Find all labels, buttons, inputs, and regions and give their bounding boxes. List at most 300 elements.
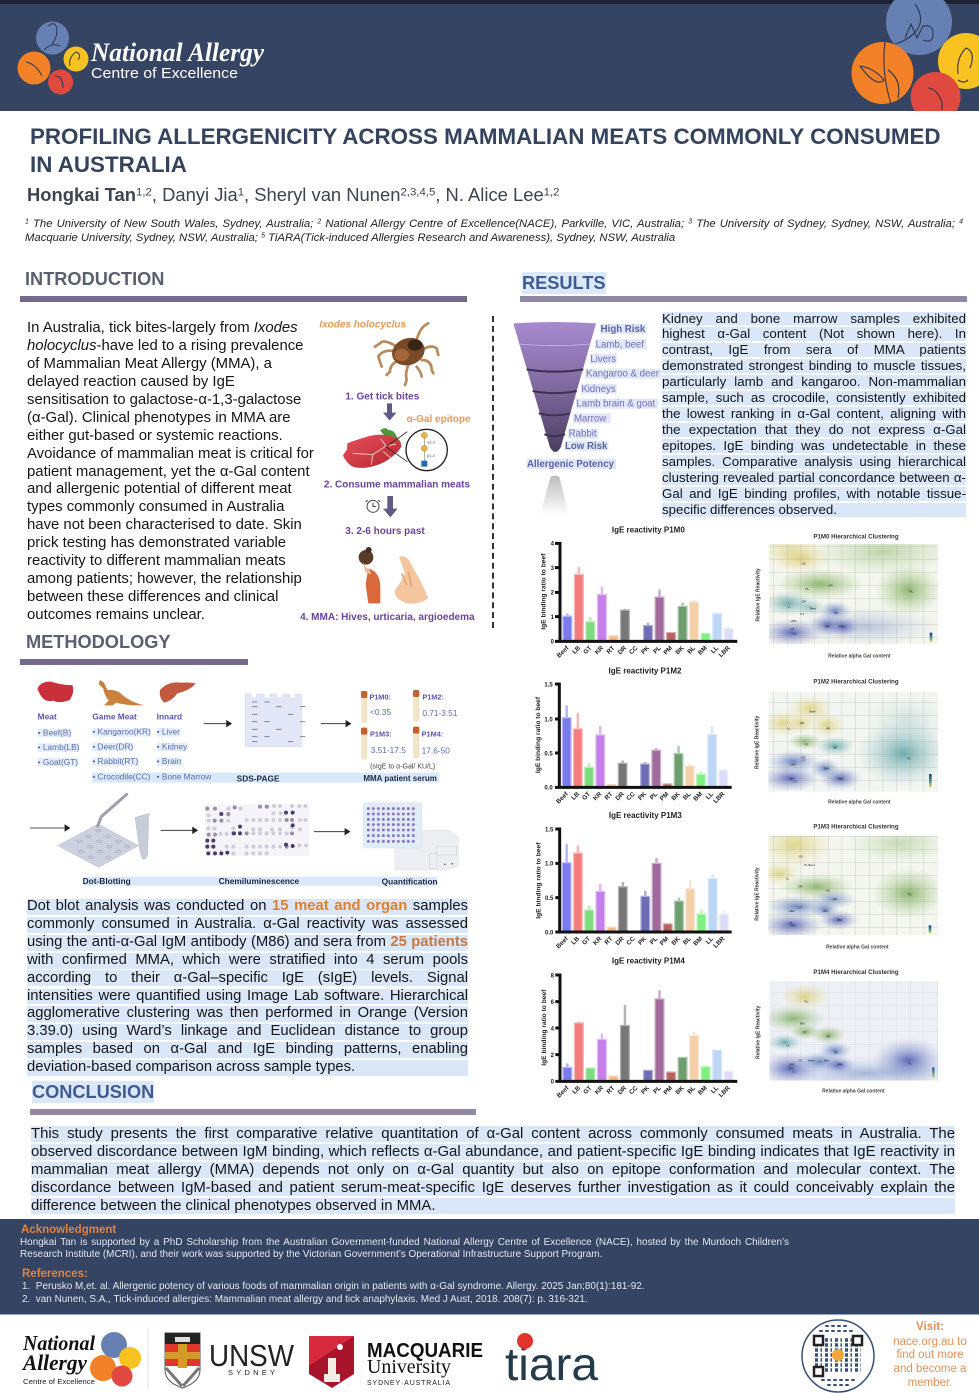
clustering map: P1M3: Relative IgE Reactivity <box>754 867 760 921</box>
allergenic potency funnel: High Risk <box>601 324 646 335</box>
clustering map: P1M0: GT <box>800 612 804 616</box>
bar chart: P1M0: RT <box>605 645 617 656</box>
QR code <box>802 1320 874 1392</box>
clustering map: P1M4: P1M4 Hierarchical Clustering <box>813 969 899 976</box>
conclusion text: difference between the clinical phenotypes observed in MMA. <box>31 1198 436 1214</box>
visit call to action: nace.org.au to <box>893 1336 967 1348</box>
icon: tick <box>375 323 438 385</box>
tick to allergy pathway figure: 2. Consume mammalian meats <box>324 479 471 490</box>
visit call to action: Visit: <box>916 1321 944 1333</box>
bar chart: P1M2: BL <box>682 791 693 802</box>
conclusion text: discordance between IgM-based and patient serum-meat-specific IgE deserves further investigation as it could conceivably explain the <box>31 1180 955 1196</box>
clustering map: P1M2: PM <box>839 777 844 781</box>
methodology workflow figure: Game Meat <box>92 712 137 722</box>
methodology workflow figure: • Deer(DR) <box>92 741 133 751</box>
results text: the expectation that they do not express α-Gal <box>662 422 966 437</box>
methodology workflow figure: SDS-PAGE <box>237 773 280 783</box>
clustering map: P1M2: Beef <box>809 710 816 714</box>
logo: Macquarie University: University <box>367 1356 451 1378</box>
clustering map: P1M4: BM <box>824 1058 829 1062</box>
bar chart: P1M3: GT <box>581 935 592 947</box>
charts panel <box>535 526 938 1099</box>
allergenic potency funnel <box>513 322 662 510</box>
bar chart: P1M0: BL <box>686 645 697 656</box>
bar chart: P1M0: BM <box>697 645 709 657</box>
methodology workflow figure: (sIgE to α-Gal/ KU/L) <box>370 764 435 771</box>
bar chart: P1M2: PM <box>659 791 670 802</box>
bar chart: P1M0: Beef <box>556 644 571 659</box>
results text: epitopes. IgE binding was undetectable in these <box>662 438 966 453</box>
clustering map: P1M2: LB <box>800 721 804 725</box>
clustering map: P1M4: LL <box>787 1044 790 1048</box>
logo: National Allergy: National <box>22 1331 95 1355</box>
clustering map: P1M3: GT <box>798 905 803 909</box>
results text: demonstrated strongest binding to muscle tissues, <box>662 358 966 373</box>
results text: contrast, IgE from sera of MMA patients <box>662 342 966 357</box>
bar chart: P1M4: GT <box>582 1085 594 1096</box>
bar chart: P1M2: PK <box>637 790 648 802</box>
acknowledgment text <box>20 1237 789 1260</box>
tick to allergy pathway figure: α-Gal epitope <box>407 414 471 425</box>
clustering map: P1M0: LL <box>787 604 791 608</box>
tick to allergy pathway figure: 3. 2-6 hours past <box>345 526 425 537</box>
bar chart: P1M3: IgE binding ratio to beef <box>536 842 543 919</box>
bar chart: P1M0: 1 <box>551 615 555 621</box>
clustering map: P1M2: Relative IgE Reactivity <box>754 715 760 769</box>
serum tubes: P1M0: <box>369 692 391 701</box>
header logo: Centre of Excellence <box>91 66 238 82</box>
clustering map: P1M0: KR <box>828 584 833 588</box>
clustering map: P1M4: PM <box>838 1062 843 1066</box>
affiliations: 1 The University of New South Wales, Sydney, Australia; 2 National Allergy Centre of Excellence(NACE), Parkville, VIC, Australia; 3 The University of Sydney, Sydney, NSW, Australia; 4 <box>25 218 963 230</box>
results text: clustering revealed partial concordance between α- <box>662 470 966 485</box>
arrow <box>30 825 70 831</box>
icon: kangaroo <box>99 680 144 705</box>
clustering map: P1M3: Relative alpha Gal content <box>826 944 889 950</box>
clustering map: P1M2: PL <box>805 742 809 746</box>
title: PROFILING ALLERGENICITY ACROSS MAMMALIAN MEATS COMMONLY CONSUMED <box>30 124 941 149</box>
bar chart: P1M3: 0.5 <box>545 896 554 902</box>
clustering map: P1M3: RT <box>789 921 793 925</box>
logo: National Allergy: Allergy <box>21 1350 87 1375</box>
affiliations: Macquarie University, Sydney, NSW, Australia; 5 TiARA(Tick-induced Allergies Research and Awareness), Sydney, NSW, Australia <box>25 232 675 244</box>
references heading: References: <box>22 1268 88 1280</box>
results text: samples. Comparative analysis using hierarchical <box>662 454 966 469</box>
bar chart: P1M4 <box>541 956 737 1099</box>
conclusion text <box>31 1126 955 1214</box>
bar chart: P1M2: Beef <box>555 790 570 805</box>
bar chart: P1M3: RT <box>603 935 615 946</box>
clustering map: P1M4: Beef <box>808 1059 815 1063</box>
bar chart: P1M3: PK <box>637 935 648 947</box>
results text: the lowest ranking in α-Gal content, aligning with <box>662 406 966 421</box>
conclusion text: mammalian meat allergy (MMA) depends not only on α-Gal quantity but also on epitope conformation and molecular context. The <box>31 1162 955 1178</box>
clustering map: P1M2: GT <box>802 759 806 763</box>
arrow <box>204 721 231 727</box>
serum tubes <box>361 690 458 759</box>
dot blot methods text <box>27 898 468 1076</box>
icon: plate reader <box>363 803 458 870</box>
title: IN AUSTRALIA <box>30 152 187 176</box>
bar chart: P1M4: LB <box>571 1084 582 1096</box>
methodology workflow figure: • Liver <box>157 726 180 736</box>
bar chart: P1M3: DR <box>614 935 626 947</box>
clustering map: P1M4: Relative IgE Reactivity <box>755 1005 761 1059</box>
dot blot methods text: intensities were quantified using Image Lab software. Hierarchical <box>27 988 468 1004</box>
clustering map: P1M0: Beef <box>810 606 816 610</box>
visit call to action: find out more <box>896 1349 964 1361</box>
heading: methodology: METHODOLOGY <box>26 632 170 652</box>
clustering map: P1M3: BM <box>823 909 828 913</box>
clustering map: P1M3: P1M3 Hierarchical Clustering <box>813 824 899 831</box>
serum tubes: P1M3: <box>370 730 392 739</box>
dot blot methods text: commonly consumed in Australia. α-Gal reactivity was assessed <box>27 916 468 932</box>
arrow <box>161 827 197 833</box>
allergenic potency funnel: Rabbit <box>569 429 597 440</box>
methodology workflow figure: • Kangaroo(KR) <box>92 726 151 736</box>
introduction text: reactivity to different mammalian meats <box>27 553 286 569</box>
logo: UNSW Sydney: UNSW <box>209 1338 295 1373</box>
introduction text: among patients; however, the relationship <box>27 571 302 587</box>
bar chart: P1M4: BK <box>674 1084 686 1096</box>
clustering map: P1M2: LL <box>787 726 791 730</box>
icon: epitope lens: α1.3 <box>427 440 436 445</box>
clustering map: P1M2: P1M2 Hierarchical Clustering <box>813 679 899 686</box>
icon: chemiluminescence membrane <box>205 804 309 856</box>
bar chart: P1M4: LBR <box>718 1085 732 1099</box>
bar chart: P1M2: 0.0 <box>544 786 553 792</box>
bar chart: P1M0 <box>540 526 737 659</box>
results text: sample, such as crocodile, consistently exhibited <box>662 390 966 405</box>
serum tubes: 3.51-17.5 <box>371 745 406 755</box>
clustering map: P1M0: DR <box>802 600 807 604</box>
bar chart: P1M4: 2 <box>551 1053 555 1059</box>
bar chart: P1M2: 1.5 <box>544 683 553 689</box>
methodology workflow figure: Quantification <box>382 876 438 886</box>
bar chart: P1M3: CC <box>625 935 637 947</box>
clustering map: P1M2 <box>754 679 950 805</box>
arrow <box>314 829 350 835</box>
introduction text: holocyclus-have led to a rising prevalence <box>27 338 303 354</box>
clustering map: P1M4: GT <box>798 1059 803 1063</box>
icon: epitope lens: β1.4 <box>427 453 436 458</box>
serum tubes: <0.35 <box>370 707 391 717</box>
methodology workflow figure: • Brain <box>157 756 182 766</box>
bar chart: P1M0: 3 <box>551 566 555 572</box>
bar chart: P1M4: KR <box>594 1084 605 1096</box>
logo: National Allergy: Centre of Excellence <box>23 1377 95 1386</box>
dot blot methods text: samples based on α-Gal and IgE binding patterns, enabling <box>27 1041 468 1057</box>
clustering map: P1M3: LL <box>786 877 790 881</box>
visit call to action: and become a <box>894 1363 967 1375</box>
bar chart: P1M0: PK <box>640 644 651 656</box>
allergenic potency funnel: Lamb brain & goat <box>576 399 656 410</box>
bar chart: P1M0: GT <box>582 645 594 656</box>
bar chart: P1M4: DR <box>617 1084 628 1096</box>
methodology workflow figure: MMA patient serum <box>363 774 437 783</box>
bar chart: P1M4: Beef <box>556 1084 571 1099</box>
arrow <box>383 403 396 421</box>
dot blot methods text: Dot blot analysis was conducted on 15 meat and organ samples <box>27 898 468 914</box>
methodology workflow figure: • Bone Marrow <box>157 771 212 781</box>
methodology workflow figure: • Rabbit(RT) <box>92 756 138 766</box>
bar chart: P1M3: 1.0 <box>545 862 554 868</box>
bar chart: P1M3 <box>536 811 732 950</box>
references list: 1. Perusko M,et. al. Allergenic potency of various foods of mammalian origin in patients with α-Gal syndrome. Allergy. 2025 Jan;80(1):181-92. <box>22 1281 645 1292</box>
clustering map: P1M4: CC <box>792 1070 797 1074</box>
bar chart: P1M0: BK <box>674 644 686 656</box>
bar chart: P1M0: LBR <box>718 645 732 659</box>
clustering map: P1M0: RT <box>791 627 795 631</box>
introduction text: types commonly consumed in Australia <box>27 499 284 515</box>
bar chart: P1M3: 0.0 <box>545 930 554 936</box>
funnel reflection <box>540 476 569 515</box>
bar chart: P1M2: PL <box>649 791 660 801</box>
bar chart: P1M3: 1.5 <box>545 827 554 833</box>
clustering map: P1M0: PM <box>839 624 844 628</box>
bar chart: P1M4: CC <box>628 1084 640 1096</box>
bar chart: P1M2: IgE reactivity P1M2 <box>609 666 682 675</box>
bar chart: P1M3: PM <box>659 935 670 947</box>
bar chart: P1M3: BK <box>670 935 682 947</box>
allergenic potency funnel: Livers <box>590 354 616 365</box>
allergenic potency funnel: Marrow <box>574 413 606 424</box>
visit call to action: member. <box>908 1377 952 1389</box>
bar chart: P1M0: LL <box>710 645 720 655</box>
heading: conclusion: CONCLUSION <box>32 1082 154 1102</box>
authors: Hongkai Tan1,2, Danyi Jia1, Sheryl van Nunen2,3,4,5, N. Alice Lee1,2 <box>27 184 560 205</box>
bar chart: P1M3: KR <box>592 935 604 947</box>
clustering map: P1M0: LBR <box>791 619 797 623</box>
logo: tiara: tiara <box>505 1338 598 1390</box>
acknowledgment heading: Acknowledgment <box>21 1224 116 1236</box>
serum tubes: P1M4: <box>422 730 443 739</box>
icon: patient with hives <box>359 547 428 604</box>
results text: specific differences observed. <box>662 502 837 517</box>
clustering map: P1M4: PL <box>805 1000 809 1004</box>
methodology workflow figure: Chemiluminescence <box>219 876 300 886</box>
clustering map: P1M3: LB <box>799 855 803 859</box>
methodology workflow figure: Innard <box>157 712 182 722</box>
allergenic potency funnel: Lamb, beef <box>596 339 644 350</box>
icon: SDS-PAGE gel <box>245 694 305 747</box>
bar chart: P1M3: BM <box>692 935 704 947</box>
clustering map: P1M0: PL <box>909 590 913 594</box>
funnel shape <box>513 322 596 452</box>
bar chart: P1M4: IgE binding ratio to beef <box>541 989 548 1066</box>
clustering map: P1M3: CC <box>791 924 796 928</box>
clustering map: P1M2: CC <box>793 779 798 783</box>
clustering map: P1M2: RT <box>790 777 794 781</box>
icon: dot-blotting membrane <box>58 794 149 867</box>
bar chart: P1M3: LBR <box>712 935 727 950</box>
bar chart: P1M0: IgE reactivity P1M0 <box>612 526 685 535</box>
introduction text: sensitisation to galactose-α-1,3-galactose <box>27 392 301 408</box>
header band <box>0 0 979 111</box>
bar chart: P1M4: 6 <box>551 1000 555 1006</box>
introduction text: and allergenic potential of different meat <box>27 481 292 497</box>
bar chart: P1M4: RT <box>605 1085 617 1096</box>
logo: Macquarie University <box>309 1336 483 1388</box>
logo: Macquarie University: SYDNEY·AUSTRALIA <box>367 1380 450 1387</box>
bar chart: P1M2: GT <box>581 791 592 802</box>
introduction text: Avoidance of mammalian meat is critical for <box>27 446 314 462</box>
bar chart: P1M2: DR <box>614 790 626 802</box>
clustering map: P1M2: BK <box>833 746 837 750</box>
clustering map: P1M0: LB <box>802 562 805 566</box>
references list <box>22 1281 645 1304</box>
allergenic potency funnel: Allergenic Potency <box>527 459 615 470</box>
icon: meat steak <box>37 682 73 702</box>
bar chart: P1M4: BM <box>697 1085 709 1097</box>
bar chart: P1M4: 0 <box>551 1080 555 1086</box>
bar chart: P1M3: BL <box>682 935 693 946</box>
title <box>30 124 941 176</box>
results text <box>662 310 966 517</box>
clustering map: P1M4: RT <box>789 1066 793 1070</box>
results text: Kidney and bone marrow samples exhibited <box>662 310 966 326</box>
references list: 2. van Nunen, S.A., Tick-induced allergies: Mammalian meat allergy and tick anaphylaxis. Med J Aust, 2018. 208(7): p. 316-321. <box>22 1294 588 1304</box>
introduction text: prick testing has demonstrated variable <box>27 535 286 551</box>
bar chart: P1M4: 8 <box>551 973 555 979</box>
clustering map: P1M3: LBR <box>789 909 795 913</box>
bar chart: P1M3: IgE reactivity P1M3 <box>609 811 682 820</box>
header logo: National Allergy <box>90 38 264 67</box>
header logo <box>18 22 264 94</box>
clustering map: P1M3: PL Beef <box>804 863 815 867</box>
bar chart: P1M3: Beef <box>555 935 570 950</box>
clustering map: P1M2: BM <box>824 766 829 770</box>
allergenic potency funnel: Low Risk <box>565 441 608 452</box>
clustering map: P1M3 <box>754 822 953 950</box>
bar chart: P1M2: KR <box>592 790 604 802</box>
clustering map: P1M2: LBR <box>790 763 797 767</box>
clustering map: P1M4: BK <box>834 1050 838 1054</box>
clustering map: P1M0: CC <box>793 631 798 635</box>
bar chart: P1M4: PL <box>652 1085 663 1095</box>
tick to allergy pathway figure <box>300 319 475 623</box>
bar chart: P1M0: IgE binding ratio to beef <box>540 553 547 630</box>
bar chart: P1M0: KR <box>594 644 605 656</box>
introduction text: between these differences and clinical <box>27 589 278 605</box>
clustering map: P1M2: Relative alpha Gal content <box>828 799 891 805</box>
dot blot methods text: agglomerative clustering was then performed in Orange (Version <box>27 1005 468 1021</box>
logo: UNSW Sydney <box>165 1333 295 1388</box>
clustering map: P1M4: BM <box>800 1022 805 1026</box>
bar chart: P1M2: BM <box>692 791 704 803</box>
arrow <box>321 721 351 727</box>
partner logos row <box>21 1319 967 1393</box>
methodology workflow figure: Meat <box>38 712 57 722</box>
clustering map: P1M4: PL <box>908 1061 912 1065</box>
bar chart: P1M0: DR <box>617 644 628 656</box>
clustering map: P1M4: LBR <box>789 1062 795 1066</box>
clustering map: P1M3: PM <box>837 918 842 922</box>
affiliations <box>25 218 963 244</box>
bar chart: P1M4: LL <box>710 1085 720 1095</box>
tick to allergy pathway figure: 1. Get tick bites <box>345 391 420 402</box>
introduction text: outcomes remains unclear. <box>27 607 205 623</box>
footer band: acknowledgment and references <box>0 1219 979 1315</box>
clustering map: P1M0: P1M0 Hierarchical Clustering <box>813 534 899 541</box>
methodology workflow figure: • Lamb(LB) <box>38 742 80 752</box>
introduction text: have not been characterised to date. Skin <box>27 517 302 533</box>
bar chart: P1M0: 2 <box>551 590 555 596</box>
bar chart: P1M4: BL <box>686 1085 697 1096</box>
bar chart: P1M2: CC <box>625 790 637 802</box>
logo: National Allergy <box>21 1331 141 1386</box>
clustering map: P1M4: GT <box>803 1030 807 1034</box>
introduction text: (α-Gal). Clinical phenotypes in MMA are <box>27 410 291 426</box>
tick to allergy pathway figure: 4. MMA: Hives, urticaria, argioedema <box>300 612 475 623</box>
allergenic potency funnel: Kangaroo & deer <box>586 369 660 380</box>
clustering map: P1M0: BM <box>825 624 830 628</box>
dot blot methods text: using the anti-α-Gal IgM antibody (M86) and sera from 25 patients <box>27 934 468 950</box>
introduction text: of Mammalian Meat Allergy (MMA), a <box>27 356 272 372</box>
clustering map: P1M2: DR <box>801 755 806 759</box>
visit call to action <box>893 1321 967 1389</box>
bar chart: P1M2: IgE binding ratio to beef <box>535 696 542 773</box>
clustering map: P1M3: KR <box>826 888 831 892</box>
clustering map: P1M3: BK <box>833 897 837 901</box>
dot blot methods text: deviation-based comparison across sample types. <box>27 1059 355 1075</box>
dashed divider <box>492 316 494 628</box>
introduction text <box>27 320 314 623</box>
introduction text: either gut-based or systemic reactions. <box>27 428 283 444</box>
bar chart: P1M2: LB <box>570 790 581 802</box>
logo: UNSW Sydney: SYDNEY <box>228 1368 275 1377</box>
heading: introduction: INTRODUCTION <box>25 269 164 289</box>
results text: highest α-Gal content (Not shown here). In <box>662 326 966 341</box>
clustering map: P1M0: Relative alpha Gal content <box>828 654 891 660</box>
header decorative circles <box>852 0 979 111</box>
icon: epitope lens <box>386 429 447 471</box>
arrow <box>383 496 398 517</box>
bar chart: P1M3: LL <box>705 935 715 946</box>
clustering map: P1M3: PL <box>908 893 912 897</box>
bar chart: P1M2: BK <box>670 790 682 802</box>
bar chart: P1M0: LB <box>571 644 582 656</box>
methodology workflow figure: • Crocodile(CC) <box>92 771 151 781</box>
clustering map: P1M0: BK <box>834 611 838 615</box>
serum tubes: P1M2: <box>422 692 444 701</box>
bar chart: P1M4: PK <box>640 1084 651 1096</box>
bar chart: P1M3: PL <box>649 935 660 946</box>
clustering map: P1M0 <box>756 528 957 660</box>
acknowledgment text: Research Institute (MCRI), and their work was supported by the Victorian Government’s Operational Infrastructure Support Program. <box>20 1249 602 1260</box>
bar chart: P1M4: 4 <box>551 1026 555 1032</box>
clustering map: P1M4: Relative alpha Gal content <box>822 1088 885 1094</box>
clustering map: P1M4: KR <box>826 1035 831 1039</box>
methodology workflow figure: • Goat(GT) <box>38 757 78 767</box>
bar chart: P1M3: LB <box>570 935 581 946</box>
bar chart: P1M2: 1.0 <box>544 717 553 723</box>
allergenic potency funnel: Kidneys <box>581 384 616 395</box>
serum tubes: 0.71-3.51 <box>422 708 458 718</box>
logo: Macquarie University: MACQUARIE <box>367 1340 483 1362</box>
conclusion text: observed discordance between IgM binding, which reflects α-Gal abundance, and patient-specific IgE binding indicates that IgE reactivity in <box>31 1144 955 1160</box>
bar chart: P1M0: 4 <box>551 541 555 547</box>
bar chart: P1M2: 0.5 <box>544 751 553 757</box>
icon: clock <box>366 500 380 512</box>
clustering map: P1M3: DR <box>798 885 803 889</box>
introduction text: delayed reaction caused by IgE <box>27 374 235 390</box>
bar chart: P1M0: 0 <box>551 639 555 645</box>
clustering map: P1M2: PL <box>907 756 911 760</box>
results text: particularly lamb and kangaroo. Non-mammalian <box>662 374 966 389</box>
dot blot methods text: according to their α-Gal–specific IgE (sIgE) levels. Signal <box>27 970 468 986</box>
bar chart: P1M2: RT <box>603 791 615 802</box>
